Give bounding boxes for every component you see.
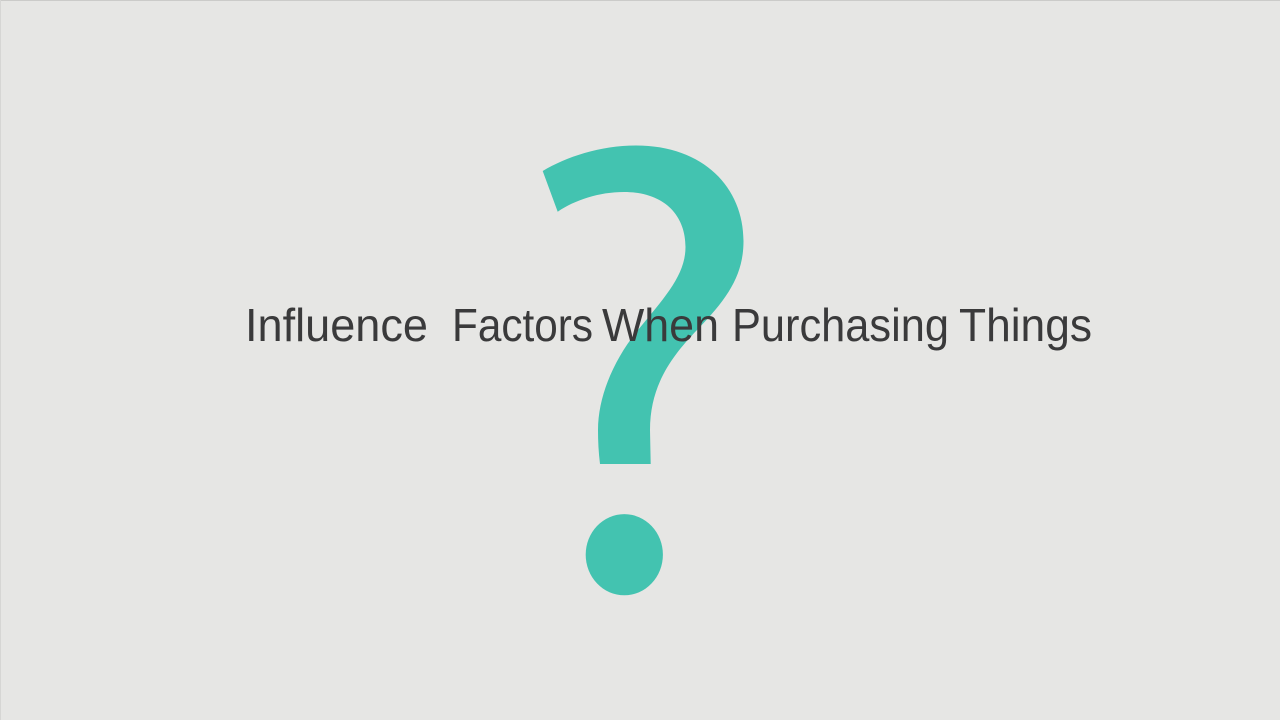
heading: When: [602, 299, 719, 351]
heading: Influence: [245, 299, 428, 351]
heading: Purchasing: [732, 299, 949, 351]
icon: large teal question mark: [543, 146, 744, 595]
heading: Factors: [452, 299, 593, 351]
heading: Things: [959, 299, 1092, 351]
